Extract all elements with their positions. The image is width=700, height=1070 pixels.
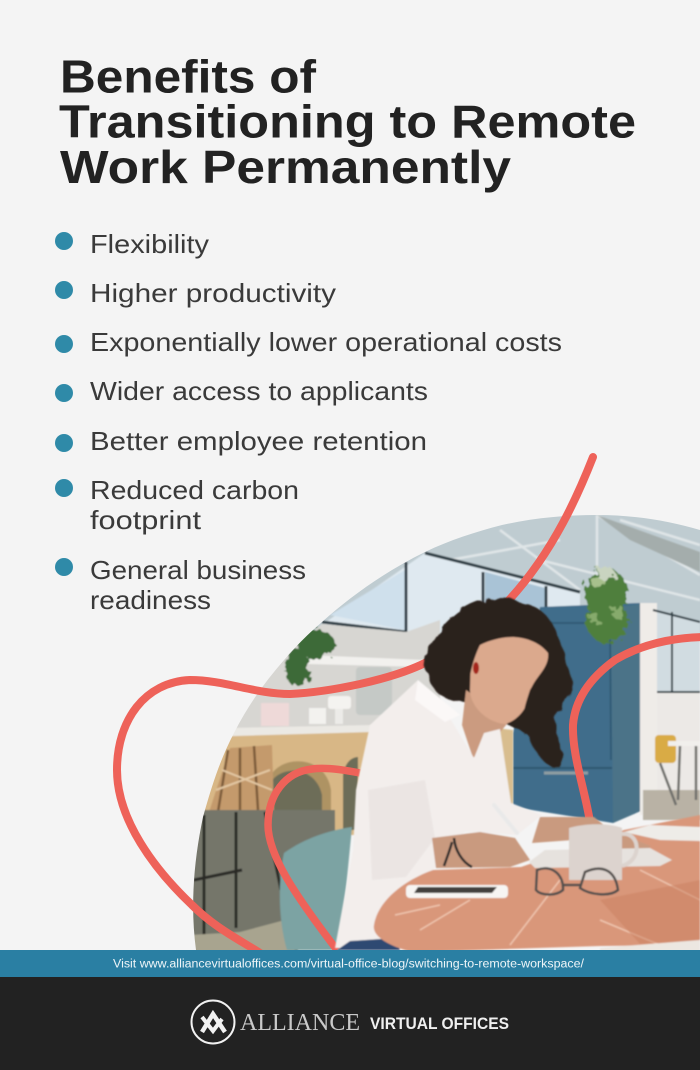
glasses [536, 868, 618, 895]
coral curve: inner left ribbon [268, 768, 360, 950]
ceiling [312, 515, 700, 633]
item: reduced carbon footprint: Reduced carbon [90, 475, 299, 505]
beige wall behind shoulder [500, 728, 514, 804]
wall plant [285, 629, 334, 687]
item: reduced carbon footprint [55, 475, 299, 535]
neck and chest [462, 690, 510, 758]
back windows [321, 551, 581, 634]
hanging plant [585, 567, 628, 643]
title: Work Permanently [60, 141, 511, 193]
phone [406, 885, 508, 898]
lower cabinet [188, 810, 335, 952]
item: general business readiness: readiness [90, 585, 211, 615]
item: wider access: Wider access to applicants [90, 376, 428, 406]
yellow chair and side table [655, 735, 700, 805]
title: Transitioning to Remote [59, 96, 636, 148]
right windows [653, 610, 700, 692]
item: flexibility: Flexibility [90, 229, 209, 259]
hair back [425, 598, 572, 767]
counter objects [261, 667, 392, 726]
bracelet [444, 838, 472, 867]
coral curve: right ribbon [573, 637, 700, 822]
logo mark [192, 1000, 234, 1044]
title [59, 50, 636, 193]
logo wordmark: ALLIANCE [240, 1010, 360, 1036]
marble table [374, 815, 700, 952]
face [470, 637, 548, 724]
pen [494, 805, 517, 833]
earring [473, 662, 479, 674]
tan counter base [200, 732, 372, 835]
woven basket [209, 745, 274, 812]
floor tiles [190, 920, 295, 952]
bullet list [55, 229, 562, 615]
coral curve: main ribbon [117, 457, 593, 953]
photo: office background [180, 505, 700, 952]
white pillar [640, 603, 657, 815]
coffee mug [569, 824, 637, 880]
teal chair [280, 827, 352, 950]
footer [0, 977, 700, 1070]
item: lower operational costs: Exponentially lower operational costs [90, 327, 562, 357]
jeans [337, 938, 400, 950]
shirt [335, 680, 542, 948]
blue cabinet [513, 603, 643, 823]
notebook [529, 848, 672, 868]
item: general business readiness [55, 555, 306, 615]
item: flexibility [55, 229, 209, 259]
right wall and floor [643, 693, 700, 820]
logo wordmark [240, 1010, 509, 1036]
item: general business readiness: General business [90, 555, 306, 585]
table paper [624, 825, 700, 841]
hair front [469, 636, 532, 735]
arm and hands [432, 817, 651, 868]
link bar: Visit www.alliancevirtualoffices.com/virtual-office-blog/switching-to-remote-workspace/ [113, 958, 585, 970]
item: reduced carbon footprint: footprint [90, 505, 202, 535]
item: employee retention: Better employee retention [90, 426, 427, 456]
title: Benefits of [60, 50, 317, 102]
arches [268, 757, 358, 835]
link bar [0, 950, 700, 977]
back wall and shelf [236, 620, 440, 728]
logo wordmark: VIRTUAL OFFICES [370, 1014, 509, 1033]
item: higher productivity: Higher productivity [90, 278, 336, 308]
woman and table [335, 598, 700, 952]
counter top [228, 725, 372, 737]
